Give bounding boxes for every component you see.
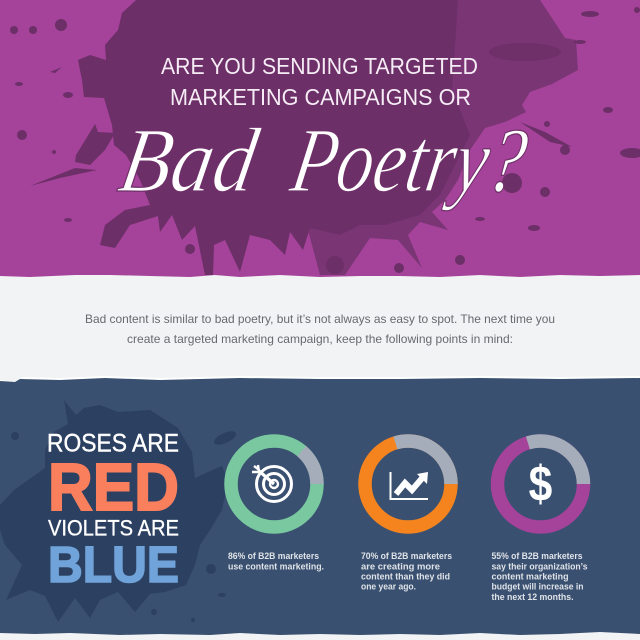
stat 1: donut chart 86% [231, 441, 317, 527]
stat 2 caption: 70% of B2B marketers [361, 550, 452, 561]
intro text [85, 312, 555, 346]
poem heading: ROSES ARE [47, 430, 179, 458]
title [161, 53, 478, 110]
stat 3 caption: 55% of B2B marketers [492, 550, 582, 561]
ink splat: navy blob [0, 400, 228, 622]
intro text: create a targeted marketing campaign, keep the following points in mind: [127, 332, 513, 346]
stat 3: donut chart 55% [498, 441, 584, 527]
ink splat: lighter right lobe [300, 0, 578, 275]
script heading: Bad [112, 110, 266, 212]
title: ARE YOU SENDING TARGETED [161, 53, 478, 79]
stat 3 caption: say their organization’s [492, 560, 588, 572]
stat 1 caption: 86% of B2B marketers [228, 550, 319, 561]
ink blot: dark streak on lobe [489, 43, 561, 61]
stat 2 caption: are creating more [361, 560, 440, 572]
script heading: Poetry? [284, 110, 534, 212]
poem heading: VIOLETS ARE [48, 516, 179, 540]
stat 2 caption: one year ago. [361, 580, 416, 592]
stat 3 caption [492, 550, 588, 602]
icon: target [252, 465, 292, 502]
panel: navy section [0, 376, 640, 635]
poem heading [47, 430, 179, 593]
icon: dollar sign: $ [529, 456, 552, 512]
stat 3 caption: content marketing [492, 570, 569, 582]
panel: purple header [0, 0, 640, 277]
poem heading: RED [48, 450, 179, 525]
stat 3 caption: budget will increase in [492, 580, 584, 592]
stat 2 caption: content than they did [361, 570, 450, 582]
ink splat: main dark blob [78, 0, 470, 275]
stat 2: donut chart 70% [365, 441, 451, 527]
stat 1 caption: use content marketing. [228, 560, 324, 572]
script heading [112, 110, 534, 212]
ink drips and speckles [10, 7, 640, 274]
title: MARKETING CAMPAIGNS OR [170, 84, 471, 110]
poem heading: BLUE [48, 536, 179, 593]
icon: growth chart [390, 472, 428, 499]
stat 2 caption [361, 550, 452, 592]
intro text: Bad content is similar to bad poetry, but it’s not always as easy to spot. The next time you [85, 312, 555, 326]
navy speckles [11, 428, 238, 622]
stat 1 caption [228, 550, 324, 572]
stat 3 caption: the next 12 months. [492, 591, 574, 602]
